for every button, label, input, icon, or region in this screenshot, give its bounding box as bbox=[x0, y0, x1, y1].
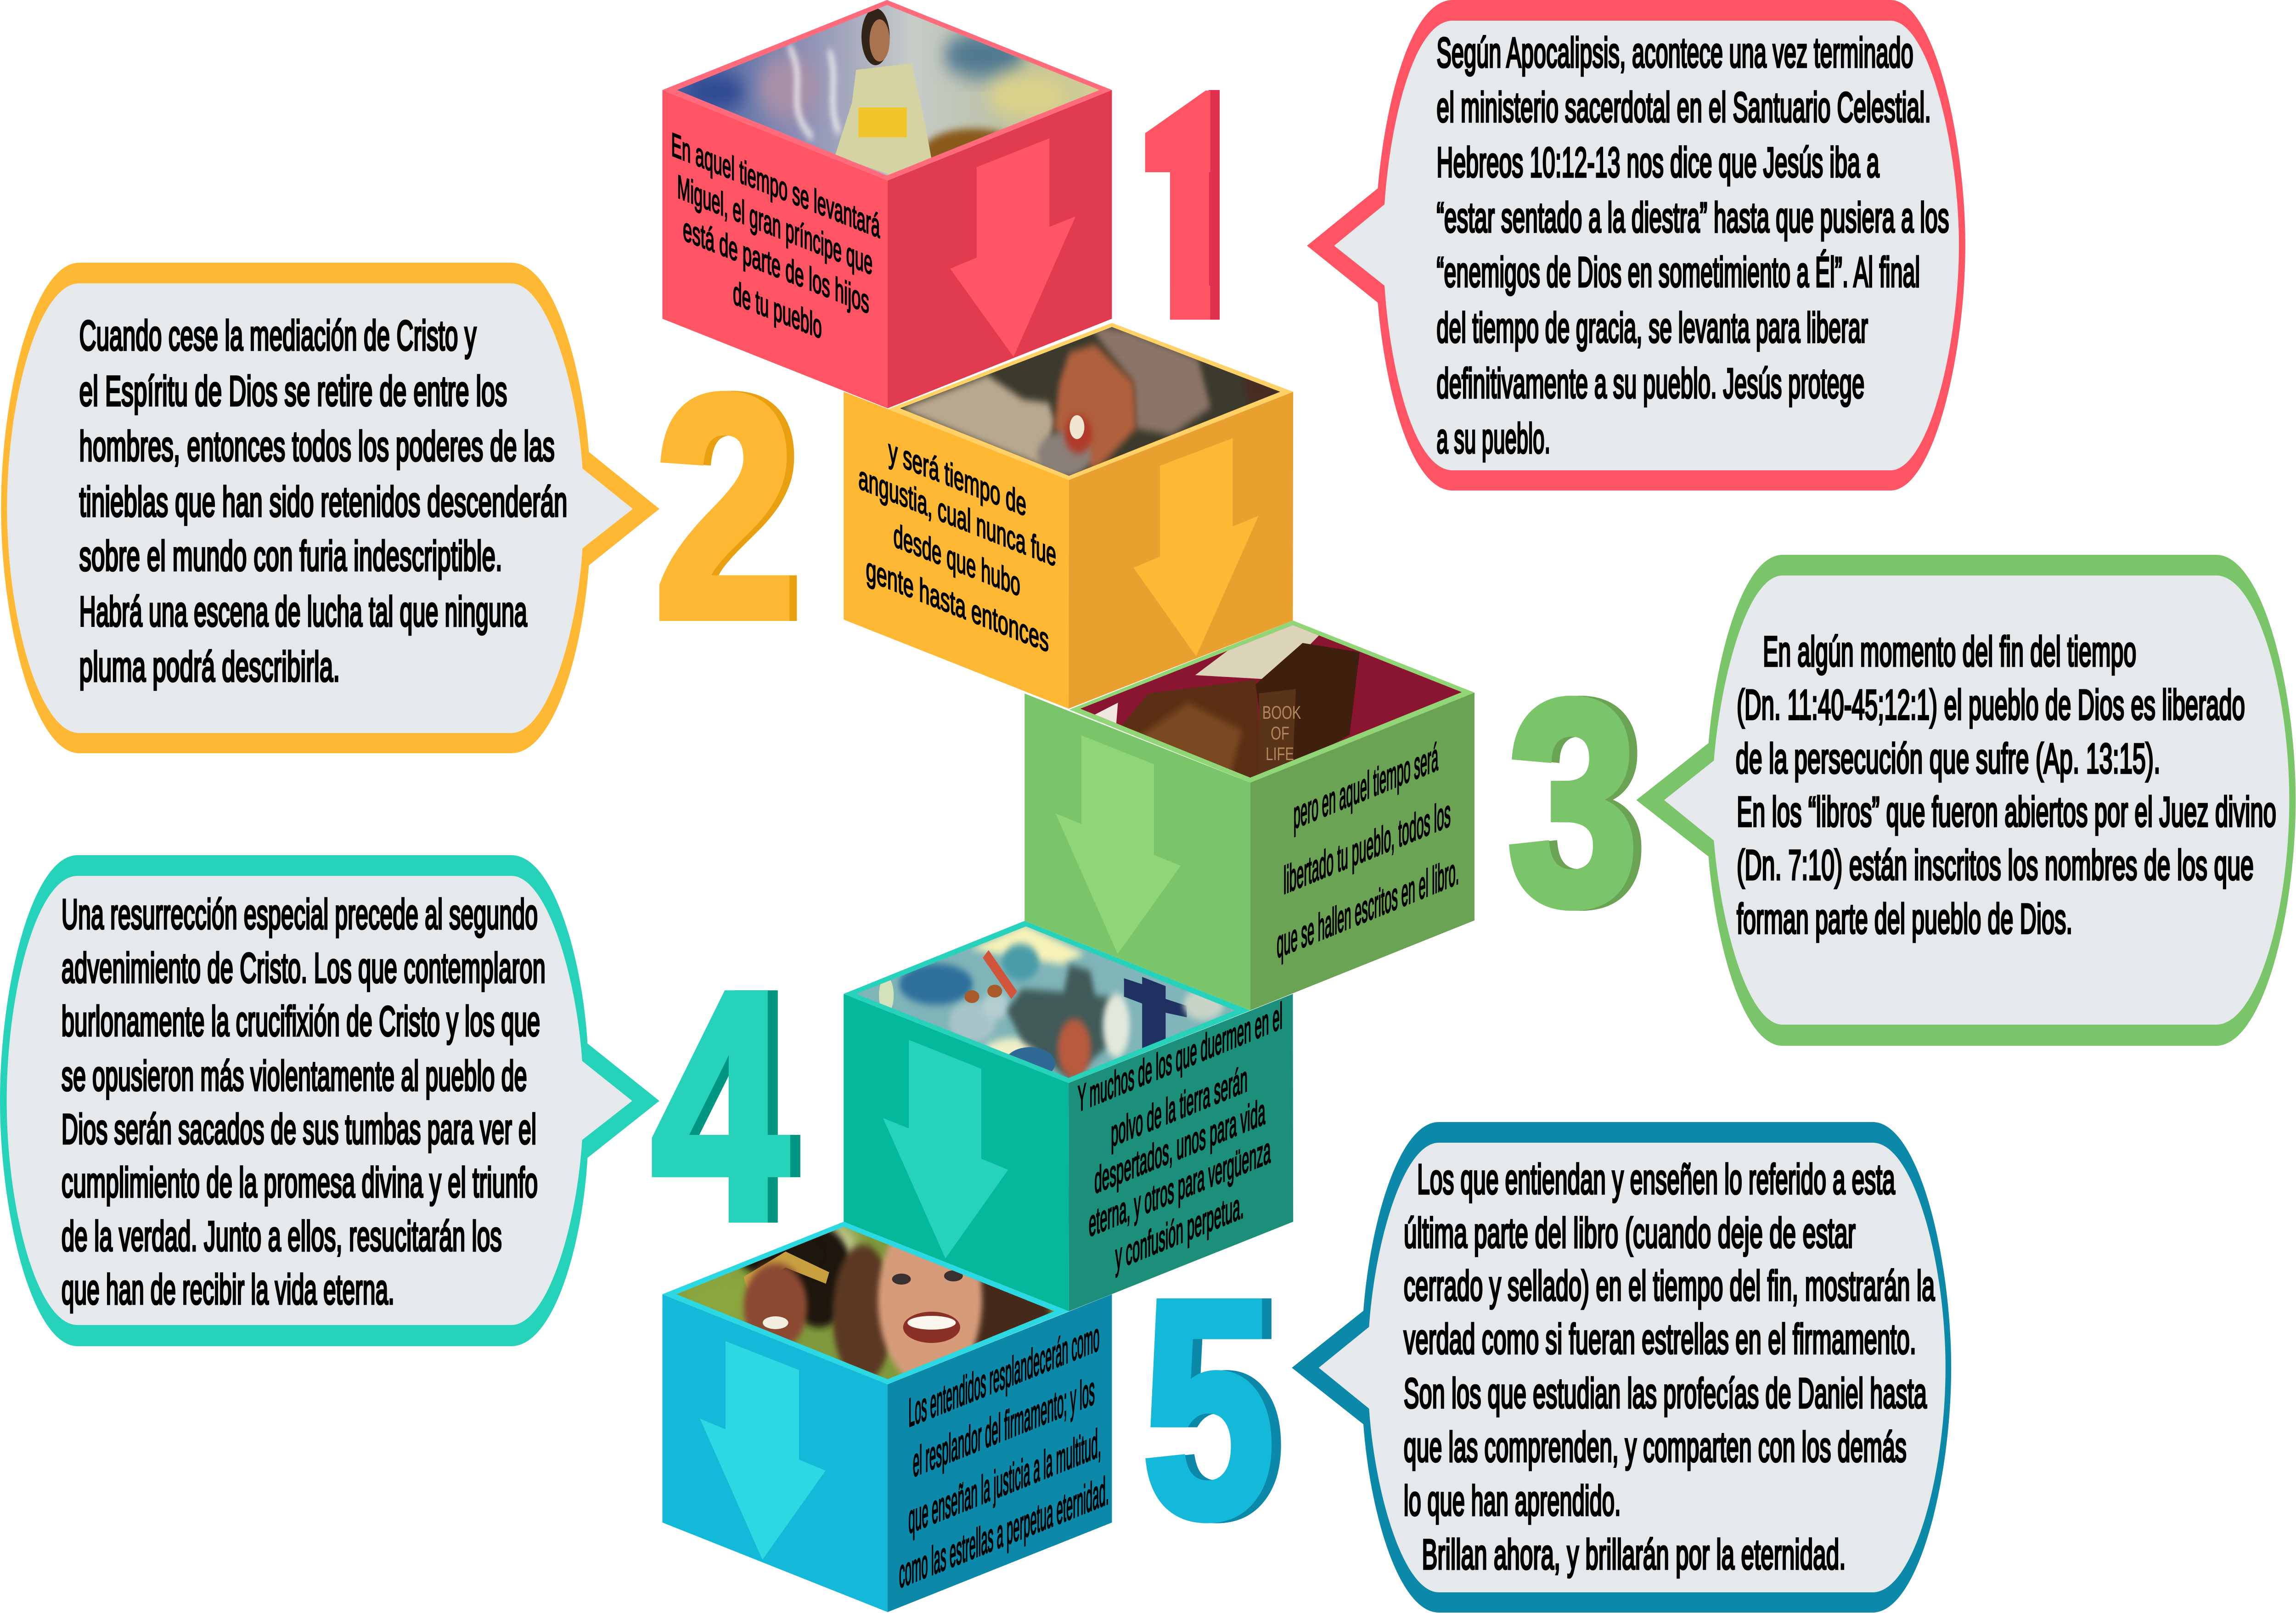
cube 4 verse text: polvo de la tierra serán bbox=[1111, 1058, 1248, 1155]
cube 4 left face bbox=[844, 994, 1069, 1311]
text: el resplandor del firmamento; y los bbox=[913, 1367, 1095, 1486]
image: resurrection scene bbox=[853, 923, 1239, 1079]
cube 1 verse text: Miguel, el gran príncipe que bbox=[677, 167, 872, 282]
bubble 2 fill bbox=[7, 283, 633, 733]
bubble 4 text: que han de recibir la vida eterna. bbox=[62, 1266, 394, 1313]
bubble 2 text: sobre el mundo con furia indescriptible. bbox=[79, 533, 502, 580]
bubble 1 border bbox=[1307, 0, 1965, 491]
bubble 3 text: En algún momento del fin del tiempo bbox=[1763, 628, 2136, 675]
cube 1 verse text: En aquel tiempo se levantará bbox=[671, 125, 880, 245]
text: que se hallen escritos en el libro. bbox=[1277, 849, 1459, 967]
callout: bubble 3 bbox=[1636, 555, 2296, 1046]
bubble 4 text: Una resurrección especial precede al segundo bbox=[62, 891, 538, 938]
bubble 1 text: Según Apocalipsis, acontece una vez terminado bbox=[1436, 29, 1913, 76]
cube 3 verse text: pero en aquel tiempo será bbox=[1294, 735, 1438, 838]
bubble 5 text: que las comprenden, y comparten con los demás bbox=[1404, 1424, 1907, 1471]
bubble 1 fill bbox=[1334, 21, 1959, 470]
cube 4 verse text: despertados, unos para vida bbox=[1094, 1091, 1266, 1202]
bubble 4 text: advenimiento de Cristo. Los que contemplaron bbox=[62, 945, 546, 992]
arrow: down 2 bbox=[1133, 438, 1259, 656]
cube 4 verse text bbox=[1078, 995, 1283, 1278]
number 5: 5 bbox=[1152, 1236, 1284, 1581]
arrow: down 4 bbox=[883, 1040, 1008, 1258]
bubble 4 text: Dios serán sacados de sus tumbas para ver el bbox=[62, 1106, 536, 1153]
text: Los entendidos resplandecerán como bbox=[908, 1313, 1099, 1436]
book spine label: LIFE bbox=[1266, 744, 1294, 764]
panel: cube 3: libertado tu pueblo, todos los bbox=[1283, 791, 1451, 903]
bubble 5 border bbox=[1292, 1122, 1951, 1613]
bubble 5 text: Son los que estudian las profecías de Daniel hasta bbox=[1404, 1370, 1927, 1417]
cube 3 left face bbox=[1024, 694, 1250, 1010]
bubble 1 text: “estar sentado a la diestra” hasta que pusiera a los bbox=[1436, 194, 1949, 241]
cube 5 top rim bbox=[662, 1222, 1069, 1384]
bubble 4 text: se opusieron más violentamente al pueblo de bbox=[62, 1053, 527, 1100]
number 1: 1 bbox=[1103, 18, 1262, 390]
cube 2 verse text bbox=[858, 431, 1056, 660]
bubble 2 text: hombres, entonces todos los poderes de las bbox=[79, 423, 555, 470]
bubble 3 text: forman parte del pueblo de Dios. bbox=[1737, 896, 2072, 942]
cube 5 left face bbox=[662, 1294, 888, 1612]
bubble 2 text: pluma podrá describirla. bbox=[79, 643, 340, 690]
number 3: 3 bbox=[1516, 640, 1646, 964]
bubble 5 text: Brillan ahora, y brillarán por la eternidad. bbox=[1422, 1531, 1846, 1578]
book spine label bbox=[1263, 706, 1301, 761]
callout: bubble 2 bbox=[1, 263, 659, 753]
image: book of life bbox=[1075, 620, 1467, 781]
bubble 1 text: del tiempo de gracia, se levanta para liberar bbox=[1436, 305, 1868, 351]
callout: bubble 4 bbox=[0, 855, 659, 1346]
bubble 1 text: definitivamente a su pueblo. Jesús protege bbox=[1436, 360, 1864, 407]
cube 2 verse text: angustia, cual nunca fue bbox=[858, 458, 1056, 574]
book spine label: BOOK bbox=[1262, 703, 1301, 723]
bubble 3 text: En los “libros” que fueron abiertos por el Juez divino bbox=[1737, 789, 2276, 835]
number 3: 3 bbox=[1508, 640, 1638, 964]
number 2: 2 bbox=[655, 330, 795, 682]
bubble 5 text: cerrado y sellado) en el tiempo del fin, mostrarán la bbox=[1404, 1263, 1935, 1309]
cube 1 verse text bbox=[671, 125, 880, 346]
arrow: down 1 bbox=[950, 138, 1075, 357]
bubble 5 fill bbox=[1319, 1143, 1946, 1592]
text: que enseñan la justicia a la multitud, bbox=[908, 1419, 1101, 1542]
bubble 2 border bbox=[1, 263, 659, 753]
cube 3 verse text bbox=[1277, 735, 1459, 967]
cube 2 left face bbox=[844, 392, 1069, 709]
cube 1 top rim bbox=[662, 0, 1112, 180]
bubble 3 text: (Dn. 7:10) están inscritos los nombres de los que bbox=[1737, 842, 2254, 889]
bubble 1 text: el ministerio sacerdotal en el Santuario Celestial. bbox=[1436, 84, 1931, 131]
bubble 3 border bbox=[1636, 555, 2296, 1046]
text: como las estrellas a perpetua eternidad. bbox=[899, 1467, 1109, 1597]
bubble 2 text: Cuando cese la mediación de Cristo y bbox=[79, 312, 477, 359]
cube 4 verse text: eterna, y otros para vergüenza bbox=[1089, 1129, 1271, 1245]
bubble 2 text: tinieblas que han sido retenidos descenderán bbox=[79, 479, 567, 525]
number 4: 4 bbox=[662, 925, 799, 1287]
cube 1 verse text: está de parte de los hijos bbox=[683, 209, 869, 321]
cube 2 right face bbox=[1069, 392, 1293, 709]
image: two smiling women bbox=[676, 1227, 1054, 1379]
bubble 4 fill bbox=[7, 876, 632, 1325]
cube 5 verse text bbox=[899, 1313, 1109, 1597]
bubble 5 text: verdad como si fueran estrellas en el firmamento. bbox=[1404, 1316, 1916, 1363]
panel: cube 3 bbox=[1024, 620, 1474, 1010]
cube 5 right face bbox=[888, 1294, 1112, 1612]
bubble 1 text: Hebreos 10:12-13 nos dice que Jesús iba a bbox=[1436, 139, 1880, 186]
bubble 2 text: Habrá una escena de lucha tal que ninguna bbox=[79, 588, 527, 635]
cube 4 right face bbox=[1069, 994, 1293, 1311]
arrow: down 5 bbox=[700, 1341, 826, 1560]
panel: cube 2 bbox=[844, 321, 1293, 709]
cube 1 right face bbox=[888, 90, 1112, 408]
bubble 4 text: de la verdad. Junto a ellos, resucitarán los bbox=[62, 1213, 502, 1260]
bubble 4 text: burlonamente la crucifixión de Cristo y los que bbox=[62, 998, 540, 1045]
bubble 2 text: el Espíritu de Dios se retire de entre los bbox=[79, 368, 507, 415]
bubble 3 text: (Dn. 11:40-45;12:1) el pueblo de Dios es liberado bbox=[1737, 682, 2245, 728]
image: Jesus standing in clouds bbox=[671, 0, 1108, 179]
cube 4 top rim bbox=[844, 921, 1250, 1083]
cube 1 verse text: de tu pueblo bbox=[733, 273, 822, 346]
bubble 5 text: lo que han aprendido. bbox=[1404, 1478, 1621, 1524]
bubble 5 text bbox=[1404, 1156, 1935, 1578]
bubble 1 text bbox=[1436, 29, 1949, 462]
cube 2 verse text: gente hasta entonces bbox=[866, 549, 1049, 660]
image: anguished man bbox=[896, 321, 1283, 478]
cube 3 top rim bbox=[1069, 620, 1474, 783]
number 2: 2 bbox=[662, 330, 803, 682]
bubble 5 text: última parte del libro (cuando deje de estar bbox=[1404, 1210, 1856, 1257]
bubble 4 text: cumplimiento de la promesa divina y el triunfo bbox=[62, 1159, 538, 1206]
bubble 3 text: de la persecución que sufre (Ap. 13:15). bbox=[1736, 735, 2161, 782]
bubble 1 text: “enemigos de Dios en sometimiento a Él”. Al final bbox=[1436, 249, 1920, 296]
cube 2 verse text: y será tiempo de bbox=[888, 431, 1026, 524]
cube 2 top rim bbox=[888, 323, 1293, 480]
panel: cube 1 bbox=[662, 0, 1112, 408]
panel: cube 4: Y muchos de los que duermen en el bbox=[1078, 995, 1283, 1120]
bubble 5 text: Los que entiendan y enseñen lo referido a esta bbox=[1417, 1156, 1895, 1203]
panel: cube 5 bbox=[662, 1213, 1112, 1612]
bubble 4 text bbox=[62, 891, 546, 1313]
cube 4 verse text: y confusión perpetua. bbox=[1115, 1184, 1244, 1278]
book spine label: OF bbox=[1271, 723, 1289, 744]
number 5: 5 bbox=[1142, 1236, 1275, 1581]
bubble 4 border bbox=[0, 855, 659, 1346]
panel: cube 4 bbox=[844, 921, 1293, 1311]
bubble 2 text bbox=[79, 312, 567, 690]
callout: bubble 5 bbox=[1292, 1122, 1951, 1613]
cube 3 right face bbox=[1250, 693, 1474, 1010]
bubble 3 fill bbox=[1664, 575, 2289, 1025]
cube 2 verse text: desde que hubo bbox=[893, 516, 1020, 603]
bubble 1 text: a su pueblo. bbox=[1436, 415, 1550, 462]
callout: bubble 1 bbox=[1307, 0, 1965, 491]
number 4: 4 bbox=[652, 925, 790, 1287]
cube 1 left face bbox=[662, 90, 888, 408]
arrow: down 3 bbox=[1056, 735, 1181, 954]
bubble 3 text bbox=[1736, 628, 2276, 942]
